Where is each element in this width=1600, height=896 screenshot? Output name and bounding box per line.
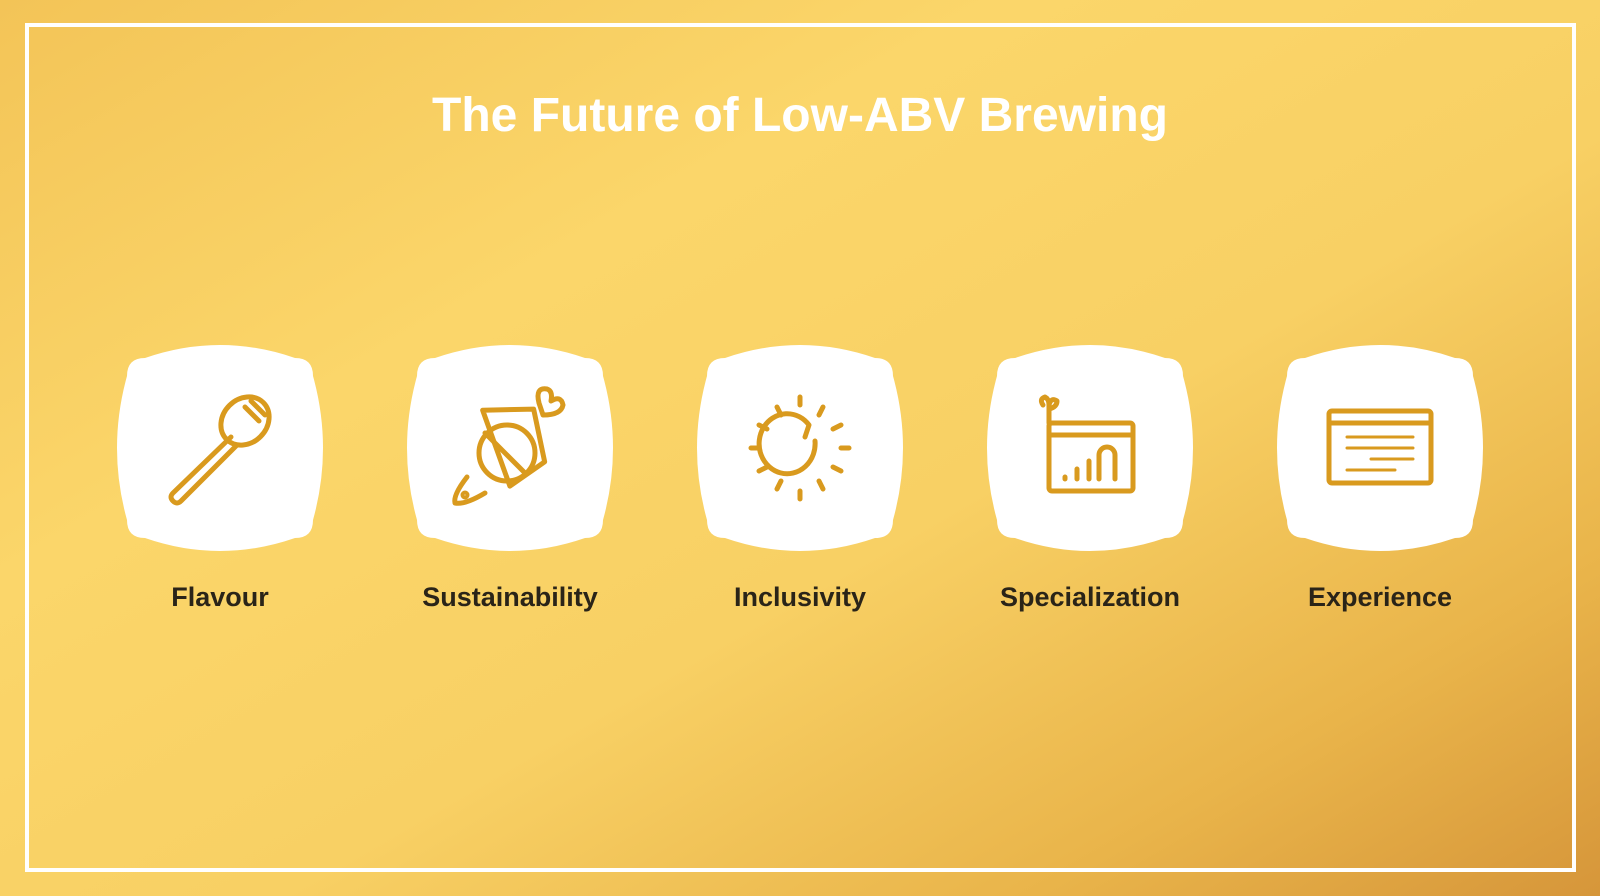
icon: spoon (171, 387, 279, 503)
label: specialization: Specialization (1000, 582, 1180, 612)
label: sustainability: Sustainability (422, 582, 598, 612)
icon: sun (751, 397, 849, 499)
label: flavour: Flavour (171, 582, 269, 612)
card: sustainability (407, 345, 613, 551)
card: specialization (987, 345, 1193, 551)
icon: chart window (1041, 397, 1133, 491)
title: The Future of Low-ABV Brewing (432, 89, 1168, 142)
icon: document window (1329, 411, 1431, 483)
label: inclusivity: Inclusivity (734, 582, 866, 612)
card: flavour (117, 345, 323, 551)
icon: rocket heart (455, 389, 563, 503)
card: experience (1277, 345, 1483, 551)
label: experience: Experience (1308, 582, 1452, 612)
card: inclusivity (697, 345, 903, 551)
